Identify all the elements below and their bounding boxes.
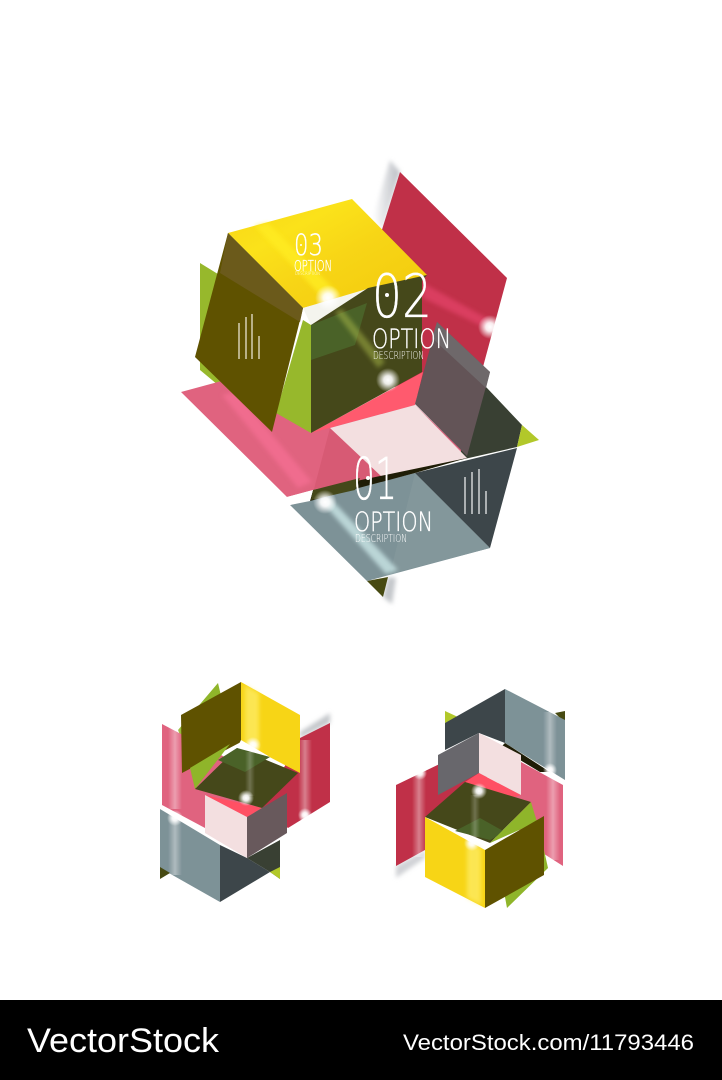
icon: bars right [465, 469, 486, 514]
green back [178, 683, 222, 785]
crimson light streak [423, 283, 490, 330]
small olive triangle [367, 577, 388, 597]
white opening [303, 288, 370, 325]
green front [190, 744, 230, 789]
crimson beam [412, 772, 426, 857]
pink beam [168, 727, 182, 809]
red glow band [311, 372, 423, 433]
blue-grey [160, 809, 220, 902]
dark green right panel [460, 372, 522, 460]
yellow highlight [255, 223, 340, 300]
footer brand: VectorStock [27, 1022, 220, 1060]
dark olive [195, 748, 298, 808]
option 01 [353, 445, 433, 545]
olive panel [181, 682, 241, 773]
dark olive panel [311, 275, 427, 433]
green tip [445, 711, 458, 723]
grey panel [438, 733, 479, 795]
olive tip [555, 711, 565, 723]
white opening [237, 740, 270, 757]
inner green [218, 748, 270, 772]
option 02: DESCRIPTION [373, 350, 424, 362]
inner green [455, 818, 505, 840]
inner green facet [311, 303, 367, 360]
blue-grey [505, 689, 565, 780]
white opening [455, 833, 490, 850]
option 02: 02 [372, 262, 432, 332]
grey panel [415, 322, 490, 456]
black shadow bar [310, 458, 467, 501]
option 02 [372, 262, 451, 362]
dark grey panel [415, 448, 517, 548]
small cube variant left [160, 682, 330, 902]
olive left panel [195, 233, 303, 432]
pale panel [479, 733, 521, 795]
dark olive beam [245, 752, 255, 796]
green tip [517, 425, 539, 447]
icon: bars left [239, 314, 259, 359]
shadow [300, 713, 330, 738]
dark olive beam [470, 795, 480, 837]
option 03: DESCRIPTION [295, 271, 320, 276]
option 02: OPTION [372, 324, 451, 355]
crimson sheet [262, 723, 330, 828]
green front panel [276, 320, 311, 433]
blue-grey beam [168, 815, 182, 875]
option 03: 03 [294, 228, 323, 262]
pink beam [546, 775, 560, 860]
small cube variant right [396, 689, 565, 908]
blue-grey beam [543, 712, 557, 774]
option 01: OPTION [354, 507, 433, 538]
option 03: OPTION [294, 257, 332, 275]
option 03 [294, 228, 332, 276]
main 3D option diagram [181, 160, 539, 604]
dark grey [445, 689, 505, 750]
pink sheet [490, 762, 563, 866]
yellow top panel [228, 199, 427, 308]
option 01: 01 [353, 445, 397, 513]
grey panel [247, 793, 287, 858]
crimson sheet [396, 745, 490, 866]
footer bar [0, 1000, 722, 1080]
glows [167, 737, 312, 826]
green tip [270, 867, 280, 879]
red band [205, 795, 262, 817]
crimson beam [298, 740, 312, 820]
pink sheet [162, 724, 262, 830]
white gap [287, 490, 313, 505]
pink streak [222, 392, 312, 488]
darker pink facet [314, 428, 383, 489]
crimson sheet [360, 172, 507, 400]
green front [490, 802, 537, 843]
olive triangle [160, 867, 170, 879]
green back [500, 850, 548, 908]
olive patch [311, 478, 360, 500]
pink sheet [181, 372, 467, 497]
red band [465, 773, 521, 800]
shadow [396, 850, 425, 878]
option 01: DESCRIPTION [355, 533, 407, 545]
dark grey [220, 845, 270, 902]
shadow bottom [383, 577, 396, 604]
yellow beam [245, 685, 259, 752]
yellow beam [467, 842, 481, 905]
glows [313, 285, 502, 514]
glows [413, 763, 557, 851]
yellow panel [425, 817, 485, 908]
bottom blue-grey panel [290, 473, 490, 581]
black shadow [500, 743, 550, 772]
olive panel [485, 816, 544, 908]
dark green [247, 840, 280, 879]
lighter blue-grey facet [390, 473, 490, 574]
sheet shadow top [373, 160, 400, 229]
yellow panel [241, 682, 300, 773]
green back sheet [200, 263, 260, 420]
footer url: VectorStock.com/11793446 [403, 1030, 694, 1055]
pale pink panel [330, 405, 467, 478]
dark olive [425, 782, 531, 843]
beam [335, 309, 385, 368]
pale panel [205, 795, 247, 858]
cyan streak [320, 498, 398, 574]
